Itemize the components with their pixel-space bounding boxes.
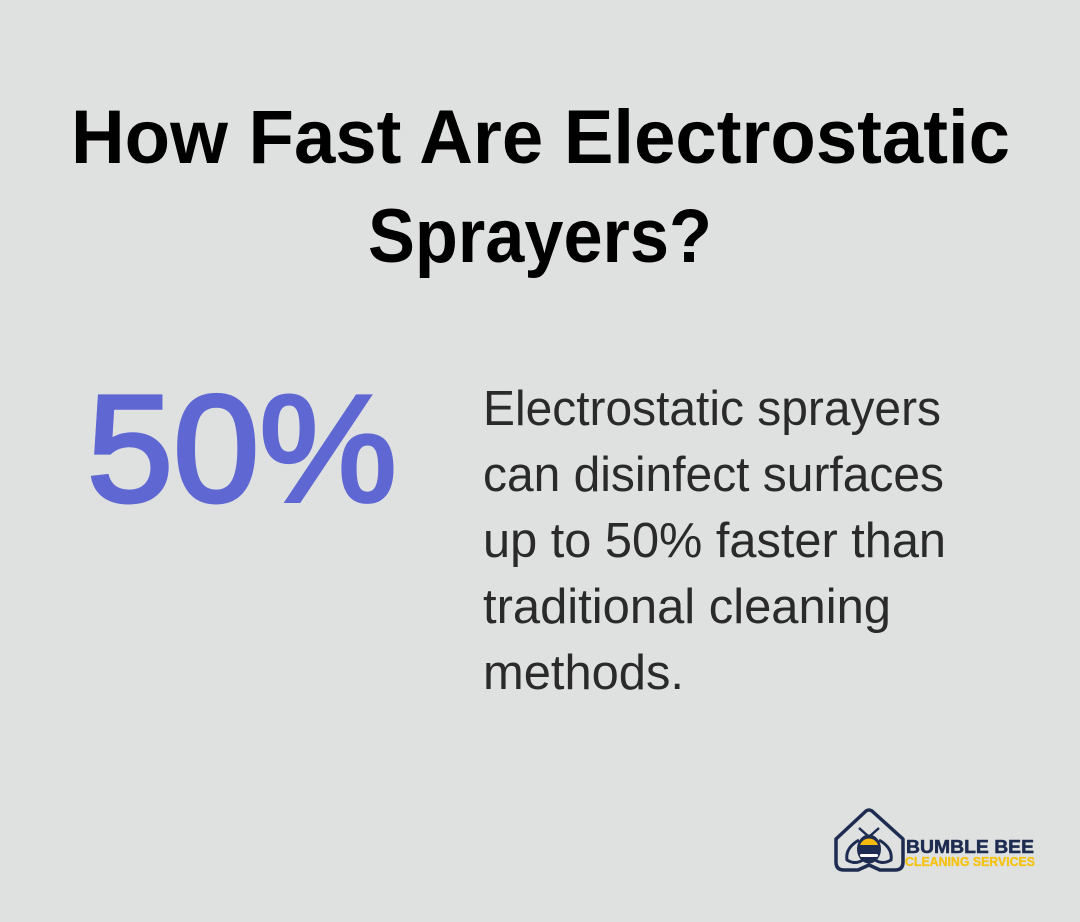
description text: traditional cleaning xyxy=(483,580,891,634)
description text: can disinfect surfaces xyxy=(483,448,944,502)
title: How Fast Are Electrostatic xyxy=(71,95,1010,180)
description text: methods. xyxy=(483,646,684,700)
icon: bee xyxy=(847,828,891,864)
description text: Electrostatic sprayers xyxy=(483,382,941,436)
logo wordmark: BUMBLE BEE xyxy=(906,836,1034,857)
title: Sprayers? xyxy=(368,194,712,279)
description text: up to 50% faster than xyxy=(483,514,946,568)
title xyxy=(71,95,1010,279)
big statistic: 50%: 50% xyxy=(87,364,397,534)
icon: house outline xyxy=(836,810,903,870)
logo tagline: CLEANING SERVICES xyxy=(905,855,1035,869)
logo: Bumble Bee Cleaning Services xyxy=(836,810,1035,870)
description text xyxy=(483,382,946,700)
